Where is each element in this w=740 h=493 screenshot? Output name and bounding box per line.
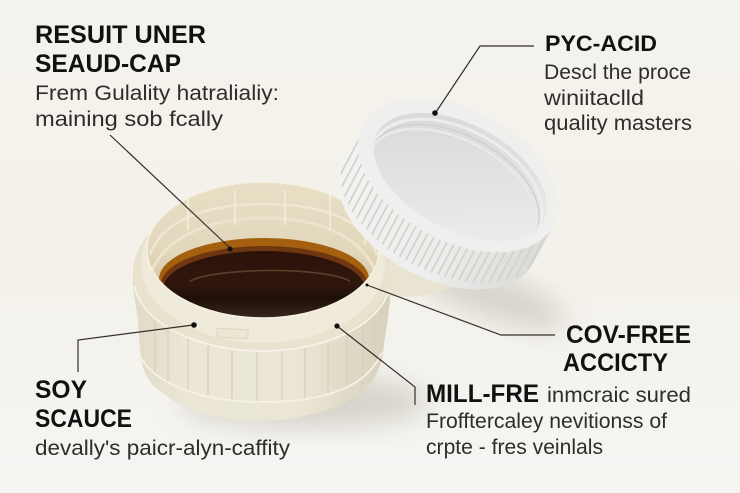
text block: pyc-acid: winiitaclld bbox=[543, 86, 644, 110]
cream cap lip bbox=[141, 185, 385, 343]
text block: cov-free: ACCICTY bbox=[563, 349, 668, 377]
leader: resuit liner bbox=[110, 135, 233, 252]
leader: pyc-acid bbox=[432, 46, 534, 116]
text block: cov-free: COV-FREE bbox=[566, 321, 691, 349]
white cap bbox=[340, 113, 553, 290]
text block: mill-free: Frofftercaley nevitionss of bbox=[426, 409, 667, 433]
text block: resuit liner: Frem Gulality hatralialiy: bbox=[35, 81, 279, 105]
text block: soy sauce: SOY bbox=[35, 376, 87, 404]
cream cap shoulder bbox=[133, 193, 391, 351]
leader: soy sauce bbox=[78, 322, 197, 372]
text block: soy sauce bbox=[35, 376, 290, 460]
cream cap ribs bbox=[155, 311, 375, 402]
text block: pyc-acid: Descl the proce bbox=[544, 60, 691, 84]
text block: soy sauce: devally's paicr-alyn-caffity bbox=[35, 436, 290, 460]
cream side behind white cap bbox=[387, 248, 455, 297]
white cap threads bbox=[374, 118, 540, 230]
text block: cov-free bbox=[563, 321, 691, 377]
white cap rim bbox=[332, 66, 584, 284]
white cap side bbox=[312, 124, 553, 321]
inner wall bbox=[147, 182, 379, 318]
small tab bbox=[217, 328, 248, 339]
cream cap lower band bbox=[141, 352, 382, 402]
text block: resuit liner: SEAUD-CAP bbox=[35, 50, 181, 78]
white cap recess bbox=[352, 86, 568, 268]
text block: mill-free: MILL-FRE bbox=[426, 380, 539, 408]
text block: mill-free: inmcraic sured bbox=[547, 383, 691, 407]
leader: cov-free bbox=[366, 284, 555, 335]
text block: pyc-acid: PYC-ACID bbox=[545, 31, 657, 56]
leader: mill-free bbox=[334, 323, 415, 405]
inner threads bbox=[150, 190, 377, 270]
lip edge bbox=[147, 182, 379, 318]
text block: resuit liner: RESUIT UNER bbox=[35, 21, 206, 49]
cream cap skirt bbox=[133, 265, 391, 421]
text block: soy sauce: SCAUCE bbox=[35, 405, 132, 433]
text block: pyc-acid bbox=[543, 31, 692, 135]
text block: pyc-acid: quality masters bbox=[544, 111, 692, 135]
text block: mill-free bbox=[426, 380, 691, 459]
cream cap shoulder highlight bbox=[134, 285, 390, 351]
text block: resuit liner: maining sob fcally bbox=[35, 107, 223, 131]
text block: mill-free: crpte - fres veinlals bbox=[426, 435, 603, 459]
soy sauce bbox=[159, 238, 369, 318]
white cap ribs bbox=[316, 124, 553, 314]
text block: resuit liner bbox=[35, 21, 279, 131]
soft shadows bbox=[180, 247, 573, 428]
cream cap with soy sauce bbox=[133, 182, 391, 421]
